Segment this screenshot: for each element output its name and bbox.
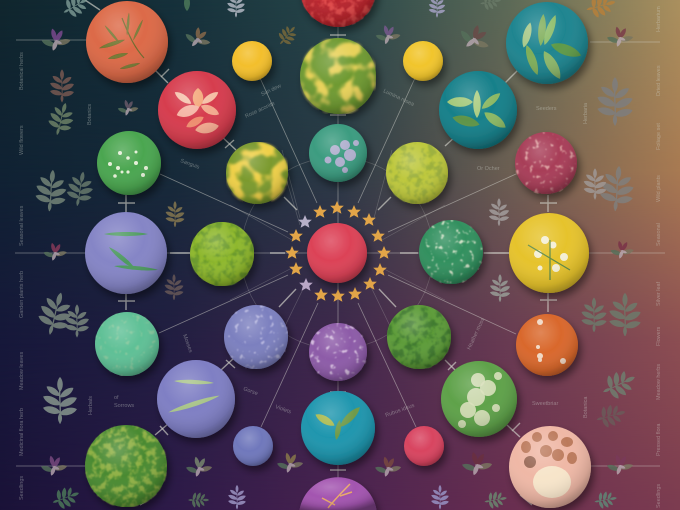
icon: silver sprig	[488, 198, 510, 226]
text: diagonal and centered captions: Sorrows	[114, 403, 134, 409]
text: diagonal and centered captions: Heather moss	[466, 317, 486, 351]
icon: small herb	[117, 99, 139, 116]
plant sprigs: left side	[33, 0, 304, 510]
sphere: green with white blossoms	[441, 361, 517, 437]
text: right column labels: Silver leaf	[656, 281, 662, 306]
text: diagonal and centered captions	[114, 83, 558, 419]
icon: silver sprig	[596, 77, 634, 125]
icon: herb	[374, 456, 402, 477]
icon: lilac flower	[428, 0, 446, 17]
text: left column labels: Wild flowers	[19, 125, 25, 155]
text: left column labels: Herbals	[88, 396, 94, 415]
icon: lilac flower	[226, 0, 246, 17]
sphere: green mottled right of center	[419, 220, 483, 284]
text: diagonal and centered captions: Seeders	[536, 106, 557, 112]
text: right column labels: Meadow herbs	[656, 364, 662, 400]
icon: silver sprig	[33, 168, 69, 213]
text: left column labels	[19, 52, 94, 500]
text: right column labels: Seedlings	[656, 484, 662, 508]
sphere: yellow and green mottled top	[300, 38, 376, 114]
sphere: mint green	[95, 312, 159, 376]
sphere: yellow with white flowers	[509, 213, 589, 293]
icon: sprig	[58, 0, 93, 22]
text: diagonal and centered captions: Gorse	[242, 386, 258, 397]
icon: lilac flower	[227, 485, 247, 509]
icon: maroon herb	[164, 274, 184, 300]
sphere: orange with sprig	[86, 1, 168, 83]
sphere: green with white specks	[97, 131, 161, 195]
sphere: moss green left	[190, 222, 254, 286]
text: left column labels: Botanical herbs	[19, 52, 25, 90]
icon: purple flower	[40, 455, 68, 476]
icon: brown sprig	[594, 401, 628, 431]
text: left column labels: Seedlings	[19, 476, 25, 500]
sphere: periwinkle speckled	[224, 305, 288, 369]
icon: green sprig	[598, 365, 641, 404]
icon: green sprig	[483, 489, 508, 510]
sphere: top red	[300, 0, 376, 27]
sphere: blue teal with leaves	[301, 391, 375, 465]
center: ring of stars	[285, 201, 391, 302]
icon: maroon flower	[606, 454, 634, 475]
text: left column labels: Botanics	[87, 104, 93, 125]
icon: flower	[41, 28, 71, 51]
icon: green sprig	[580, 298, 608, 332]
sphere: moss green right	[387, 305, 451, 369]
sphere: center red	[307, 223, 367, 283]
icon: gold sprig	[165, 201, 185, 227]
icon: grey-green leaves	[479, 0, 502, 12]
icon: lilac flower	[430, 485, 450, 509]
sphere: maroon with blossoms	[515, 132, 577, 194]
icon: green sprig	[188, 492, 209, 508]
sphere: yellow green mossy	[386, 142, 448, 204]
text: right column labels: Dried leaves	[656, 65, 662, 96]
plant sprigs: right side	[374, 0, 642, 510]
icon: dried sprig	[49, 69, 75, 102]
icon: herb	[276, 452, 304, 473]
text: left column labels: Meadow leaves	[19, 352, 25, 390]
text: diagonal and centered captions: Sanguis	[179, 158, 200, 171]
icon: maroon flower	[610, 240, 634, 259]
icon: silver sprig	[583, 168, 607, 199]
text: diagonal and centered captions: Lumina rosea	[382, 88, 416, 108]
icon: silver sprig	[64, 304, 90, 337]
icon: maroon flower	[606, 26, 634, 47]
icon: green leaf	[184, 0, 190, 11]
sphere: small yellow right	[403, 41, 443, 81]
text: diagonal and centered captions: Rubus ideus	[385, 403, 416, 419]
text: left column labels: Medicinal flora herb	[19, 408, 25, 456]
text: diagonal and centered captions: Sweetbriar	[532, 401, 558, 407]
sphere: bottom purple	[300, 477, 376, 510]
text: right column labels: Flowers	[656, 326, 662, 346]
text: right column labels	[583, 6, 662, 508]
icon: silver sprig	[597, 164, 637, 212]
text: diagonal and centered captions: Or Ocher	[477, 166, 500, 172]
text: diagonal and centered captions: of	[114, 395, 119, 401]
icon: green sprig	[608, 293, 642, 336]
text: left column labels: Garden plants herb	[19, 271, 25, 318]
text: right column labels: Foliage set	[656, 123, 662, 150]
sphere: peach with nuts	[509, 426, 591, 508]
icon: herb	[185, 456, 213, 477]
text: diagonal and centered captions: Mosses	[181, 334, 193, 354]
icon: brown herb	[454, 18, 496, 57]
icon: silver sprig	[42, 377, 78, 424]
text: right column labels: Botanica	[583, 396, 589, 418]
text: right column labels: Seasonal	[656, 223, 662, 246]
sphere: red with flower	[158, 71, 236, 149]
text: right column labels: Wild plants	[656, 175, 662, 202]
sphere: small yellow left	[232, 41, 272, 81]
icon: green sprig	[593, 489, 618, 510]
icon: silver sprig	[64, 169, 97, 208]
sphere: periwinkle with fern	[85, 212, 167, 294]
icon: herb	[182, 23, 215, 52]
sphere: yellow mottled with green	[226, 142, 288, 204]
icon: silver sprig	[33, 288, 77, 339]
text: diagonal and centered captions: Violets	[274, 404, 292, 416]
icon: herb	[274, 21, 302, 50]
icon: herb	[461, 451, 493, 476]
icon: green herb	[45, 100, 78, 138]
icon: green sprig	[49, 483, 83, 510]
icon: herb	[375, 25, 401, 45]
text: diagonal and centered captions: Sun dew	[260, 83, 282, 98]
icon: maroon flower	[43, 242, 67, 261]
sphere: teal with lilac blossoms	[309, 124, 367, 182]
icon: gold sprig	[584, 0, 618, 21]
text: right column labels: Herbarium	[656, 6, 662, 32]
sphere: leafy green	[85, 425, 167, 507]
text: right column labels: Herbaria	[583, 102, 589, 124]
sphere: purple speckled	[309, 323, 367, 381]
sphere: teal with leaves	[506, 2, 588, 84]
text: diagonal and centered captions: Rose aconite	[244, 101, 276, 120]
text: left column labels: Seasonal leaves	[19, 205, 25, 246]
text: right column labels: Pressed flora	[656, 423, 662, 456]
sphere: small periwinkle	[233, 426, 273, 466]
sphere: teal with mint	[439, 71, 517, 149]
icon: silver sprig	[489, 274, 511, 302]
sphere: small pink	[404, 426, 444, 466]
sphere: orange with specks	[516, 314, 578, 376]
sphere: periwinkle with two leaves	[157, 360, 235, 438]
